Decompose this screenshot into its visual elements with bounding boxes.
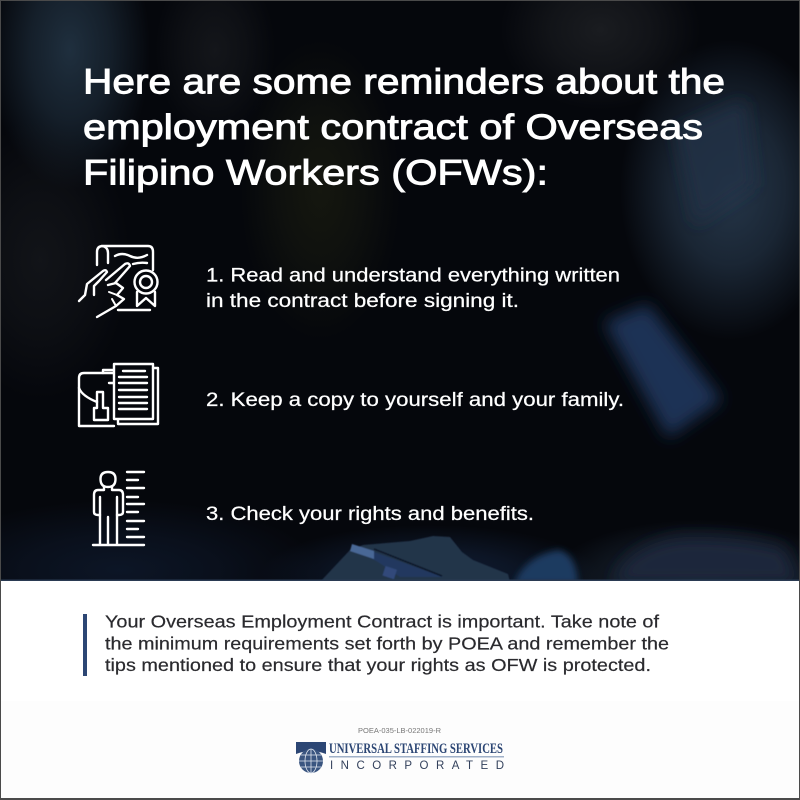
step 2 text: 2. Keep a copy to yourself and your family.	[206, 389, 624, 411]
icon: briefcase and documents	[79, 364, 158, 426]
title	[83, 62, 725, 192]
title: Filipino Workers (OFWs):	[83, 154, 548, 192]
step 3 text: 3. Check your rights and benefits.	[206, 503, 534, 525]
icon: person with height scale	[93, 472, 144, 545]
title: Here are some reminders about the	[83, 62, 725, 102]
callout text: tips mentioned to ensure that your rights as OFW is protected.	[105, 655, 651, 675]
permit number: POEA-035-LB-022019-R	[358, 728, 441, 735]
summary panel	[0, 580, 800, 800]
callout text	[105, 612, 669, 675]
hand holding pen	[320, 536, 510, 582]
logo: Universal Staffing Services	[296, 741, 504, 773]
callout text: the minimum requirements set forth by POEA and remember the	[105, 634, 669, 654]
logo emblem	[296, 742, 326, 773]
callout text: Your Overseas Employment Contract is important. Take note of	[105, 612, 659, 632]
title: employment contract of Overseas	[83, 108, 703, 147]
step 1 text: in the contract before signing it.	[206, 290, 519, 312]
callout accent bar	[83, 614, 87, 676]
company subtitle: INCORPORATED	[330, 760, 504, 772]
company name: UNIVERSAL STAFFING SERVICES	[329, 741, 503, 757]
background photo panel	[0, 0, 800, 640]
step 1 text: 1. Read and understand everything written	[206, 264, 620, 286]
icon: contract with hand and seal	[79, 246, 158, 317]
step 1 text	[206, 264, 620, 312]
